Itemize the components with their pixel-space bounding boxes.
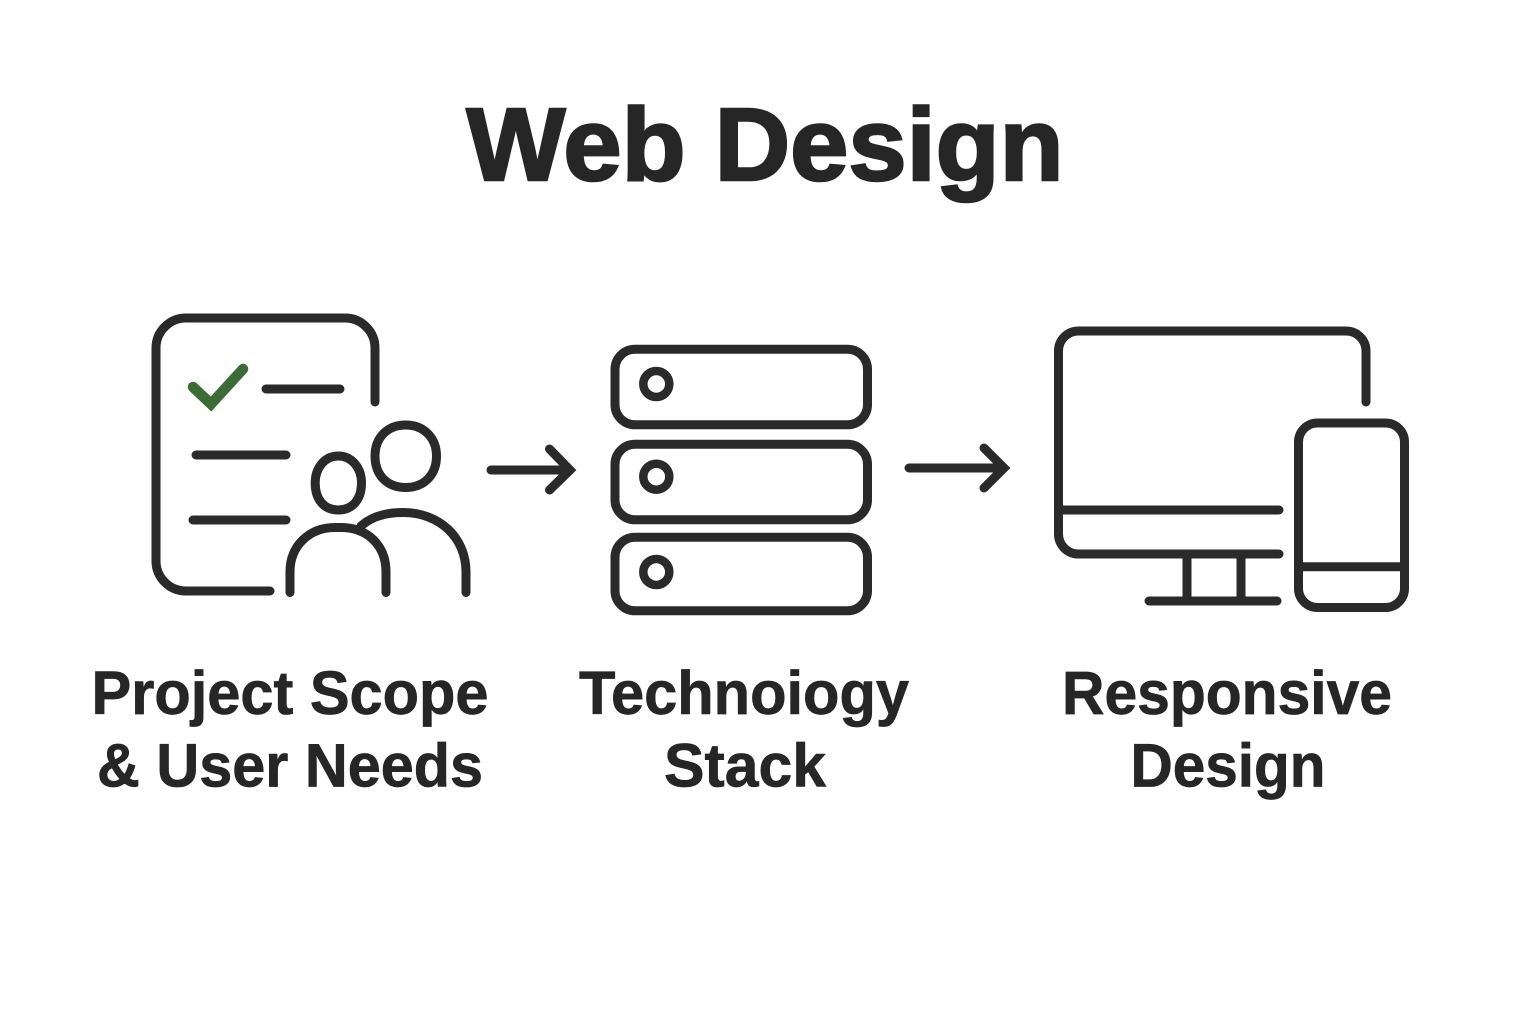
monitor [1058, 331, 1366, 601]
label: project scope [92, 659, 488, 800]
icon: checklist and users [156, 318, 466, 592]
label: technology stack: Stack [664, 732, 826, 800]
green check mark [193, 369, 243, 404]
title: Web Design [466, 87, 1064, 202]
server 1 indicator [643, 371, 669, 397]
arrow 1 [491, 449, 570, 490]
server 2 indicator [643, 464, 669, 490]
server 2 [615, 444, 868, 520]
label: responsive design: Design [1130, 732, 1326, 800]
label: technology stack: Technoiogy [579, 659, 909, 727]
checklist lines [193, 389, 340, 520]
label: project scope: Project Scope [92, 659, 488, 727]
phone [1298, 423, 1404, 608]
phone home bar [1300, 562, 1403, 571]
label: responsive design: Responsive [1062, 659, 1392, 727]
user back [361, 425, 466, 592]
icon: server stack [615, 349, 868, 611]
arrow 2 [909, 448, 1004, 488]
server 3 [615, 537, 868, 611]
label: responsive design [1062, 659, 1392, 800]
server 3 indicator [643, 559, 669, 585]
label: technology stack [579, 659, 909, 800]
server 1 [615, 349, 868, 425]
user front [290, 456, 386, 592]
checklist document [156, 318, 375, 591]
label: project scope: & User Needs [97, 732, 483, 800]
icon: responsive devices [1058, 331, 1404, 608]
